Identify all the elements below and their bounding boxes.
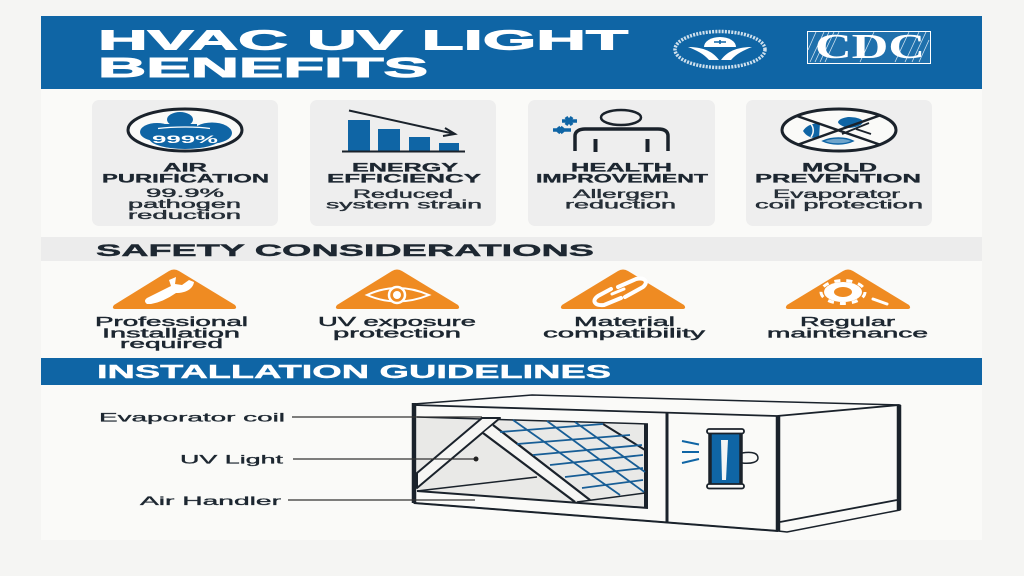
heading: IMPROVEMENT bbox=[536, 172, 710, 186]
panel: safety item, UV exposure bbox=[318, 270, 476, 340]
coil grid bbox=[500, 420, 645, 495]
heading: PURIFICATION bbox=[102, 172, 269, 186]
icon: falling bar chart bbox=[342, 110, 465, 152]
icon: wrench warning triangle bbox=[113, 270, 236, 309]
heading bbox=[755, 160, 921, 186]
text block: Reduced bbox=[353, 189, 453, 201]
text block bbox=[543, 315, 707, 340]
text block bbox=[767, 315, 928, 340]
safety heading band bbox=[41, 237, 982, 261]
text block: compatibility bbox=[543, 326, 707, 340]
heading bbox=[536, 160, 710, 186]
heading: PREVENTION bbox=[755, 172, 921, 186]
icon: air purification badge bbox=[128, 109, 242, 151]
title: BENEFITS bbox=[98, 52, 428, 83]
text block: coil protection bbox=[755, 200, 923, 212]
text block: maintenance bbox=[767, 326, 928, 340]
icon: no mold bbox=[782, 109, 896, 151]
header banner bbox=[41, 16, 982, 89]
text block: system strain bbox=[326, 200, 482, 212]
heading bbox=[327, 160, 481, 186]
text block: Professional bbox=[95, 315, 248, 329]
icon: eye warning triangle bbox=[336, 270, 459, 309]
icon: gear warning triangle bbox=[786, 270, 910, 309]
text block: reduction bbox=[565, 200, 676, 212]
callout: evaporator coil: Evaporator coil bbox=[99, 410, 285, 424]
icon: CDC logo bbox=[808, 27, 930, 66]
text block: protection bbox=[333, 326, 461, 340]
text block: Regular bbox=[800, 315, 895, 329]
callout: UV light: UV Light bbox=[180, 452, 284, 466]
panel: health improvement bbox=[528, 100, 715, 226]
coil window bbox=[417, 417, 648, 508]
heading: AIR bbox=[163, 160, 208, 174]
panel: mold prevention bbox=[746, 100, 932, 226]
icon: EPA seal bbox=[675, 32, 765, 68]
installation heading band bbox=[41, 358, 982, 385]
text block bbox=[326, 189, 482, 212]
panel: safety item, professional installation bbox=[95, 270, 248, 351]
panel: safety item, regular maintenance bbox=[767, 270, 928, 340]
cabinet bbox=[414, 395, 900, 532]
text block bbox=[755, 189, 923, 212]
panel: safety item, material compatibility bbox=[543, 270, 707, 340]
UV lamp bbox=[682, 429, 758, 488]
installation heading band: INSTALLATION GUIDELINES bbox=[97, 362, 611, 382]
icon: CDC logo: CDC bbox=[815, 27, 925, 66]
text block: Material bbox=[574, 315, 675, 329]
text block: required bbox=[120, 337, 223, 351]
heading: ENERGY bbox=[352, 160, 458, 174]
icon: chain link warning triangle bbox=[561, 270, 685, 309]
text block bbox=[565, 189, 676, 212]
text block: 99.9% bbox=[146, 188, 224, 200]
heading bbox=[102, 160, 269, 186]
title: HVAC UV LIGHT bbox=[98, 24, 628, 56]
diagram: air handler unit bbox=[414, 395, 900, 532]
heading: HEALTH bbox=[571, 160, 672, 174]
panel: page body bbox=[41, 89, 982, 540]
safety heading band: SAFETY CONSIDERATIONS bbox=[96, 241, 594, 260]
panel: air purification bbox=[92, 100, 278, 226]
heading: EFFICIENCY bbox=[327, 172, 481, 186]
icon: person with allergens bbox=[553, 110, 668, 152]
text block: pathogen bbox=[128, 199, 241, 211]
callout: UV light bbox=[180, 452, 478, 466]
panel: energy efficiency bbox=[310, 100, 496, 226]
callout: air handler: Air Handler bbox=[140, 494, 281, 508]
text block: reduction bbox=[128, 210, 241, 222]
text block: Allergen bbox=[573, 189, 669, 201]
text block: Evaporator bbox=[773, 189, 900, 201]
text block bbox=[128, 188, 241, 222]
text block bbox=[95, 315, 248, 351]
text block: Installation bbox=[102, 326, 240, 340]
text block: UV exposure bbox=[318, 315, 476, 329]
text block bbox=[318, 315, 476, 340]
icon: air purification badge: 999% bbox=[152, 134, 218, 146]
title bbox=[98, 24, 628, 83]
heading: MOLD bbox=[802, 160, 878, 174]
